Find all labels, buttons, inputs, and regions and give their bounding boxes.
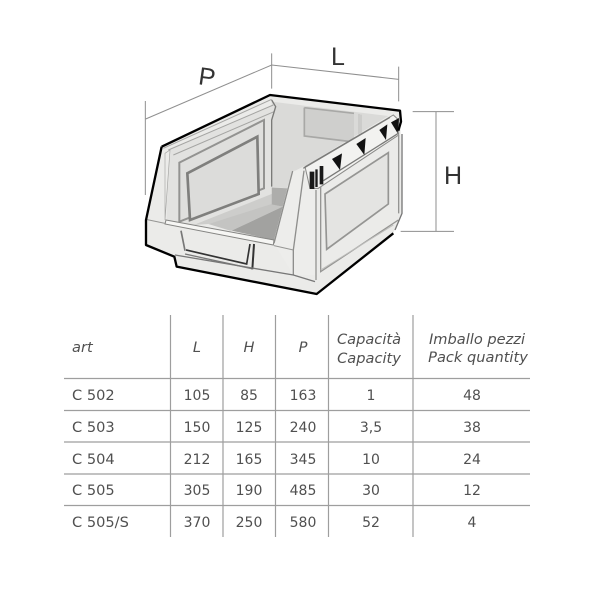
row: C 502 [72, 387, 481, 404]
row: C 505/S: C 505/S [72, 514, 129, 531]
row: C 505 [72, 482, 481, 499]
row: C 504: 212 [184, 452, 210, 468]
row: C 504: 24 [463, 452, 481, 468]
row: C 505/S: 250 [236, 515, 262, 531]
row: C 505: C 505 [72, 482, 115, 499]
table header: Imballo pezzi [429, 331, 525, 348]
row: C 505: 485 [290, 483, 316, 499]
front wedge [274, 170, 315, 275]
row: C 502: 105 [184, 388, 210, 404]
row: C 504: 165 [236, 452, 262, 468]
dimension label P: P [197, 62, 217, 92]
row: C 503: 125 [236, 420, 262, 436]
row: C 502: 1 [367, 388, 375, 404]
row: C 504: C 504 [72, 451, 115, 468]
product diagram: storage bin with dimensions [144, 43, 462, 296]
left wall [167, 105, 275, 225]
row: C 505/S: 4 [468, 515, 477, 531]
table header: Capacity [337, 350, 401, 367]
interior floor [193, 193, 272, 225]
row: C 505: 30 [362, 483, 380, 499]
dimension label L: L [331, 43, 345, 71]
side panel [325, 153, 388, 249]
row: C 503: 150 [184, 420, 210, 436]
front lip [165, 220, 274, 245]
front handle label [181, 231, 254, 269]
row: C 505: 190 [236, 483, 262, 499]
row: C 504 [72, 451, 481, 468]
row: C 505/S [72, 514, 477, 531]
table header: Pack quantity [428, 349, 528, 366]
row: C 502: 48 [463, 388, 481, 404]
row: C 502: C 502 [72, 387, 115, 404]
table header [72, 331, 528, 367]
dimension label H: H [444, 162, 462, 190]
row: C 503: 240 [290, 420, 316, 436]
row: C 505: 12 [463, 483, 481, 499]
row: C 503: 3,5 [360, 420, 382, 436]
row: C 505/S: 370 [184, 515, 210, 531]
row: C 503 [72, 419, 481, 436]
side rail [305, 115, 399, 188]
bin outline [162, 95, 401, 147]
row: C 505/S: 52 [362, 515, 380, 531]
row: C 505/S: 580 [290, 515, 316, 531]
row: C 503: C 503 [72, 419, 115, 436]
table grid [64, 315, 530, 537]
row: C 503: 38 [463, 420, 481, 436]
table header: P [299, 339, 308, 356]
bin body [146, 95, 402, 294]
row: C 505: 305 [184, 483, 210, 499]
table header: Capacità [337, 331, 401, 348]
row: C 504: 10 [362, 452, 380, 468]
dimension lines [145, 53, 454, 231]
row: C 504: 345 [290, 452, 316, 468]
interior back wall [272, 102, 388, 188]
table header: L [193, 339, 201, 356]
table header: H [244, 339, 255, 356]
rail notches [332, 153, 342, 170]
table header: art [72, 339, 94, 356]
row: C 502: 163 [290, 388, 316, 404]
row: C 502: 85 [240, 388, 258, 404]
